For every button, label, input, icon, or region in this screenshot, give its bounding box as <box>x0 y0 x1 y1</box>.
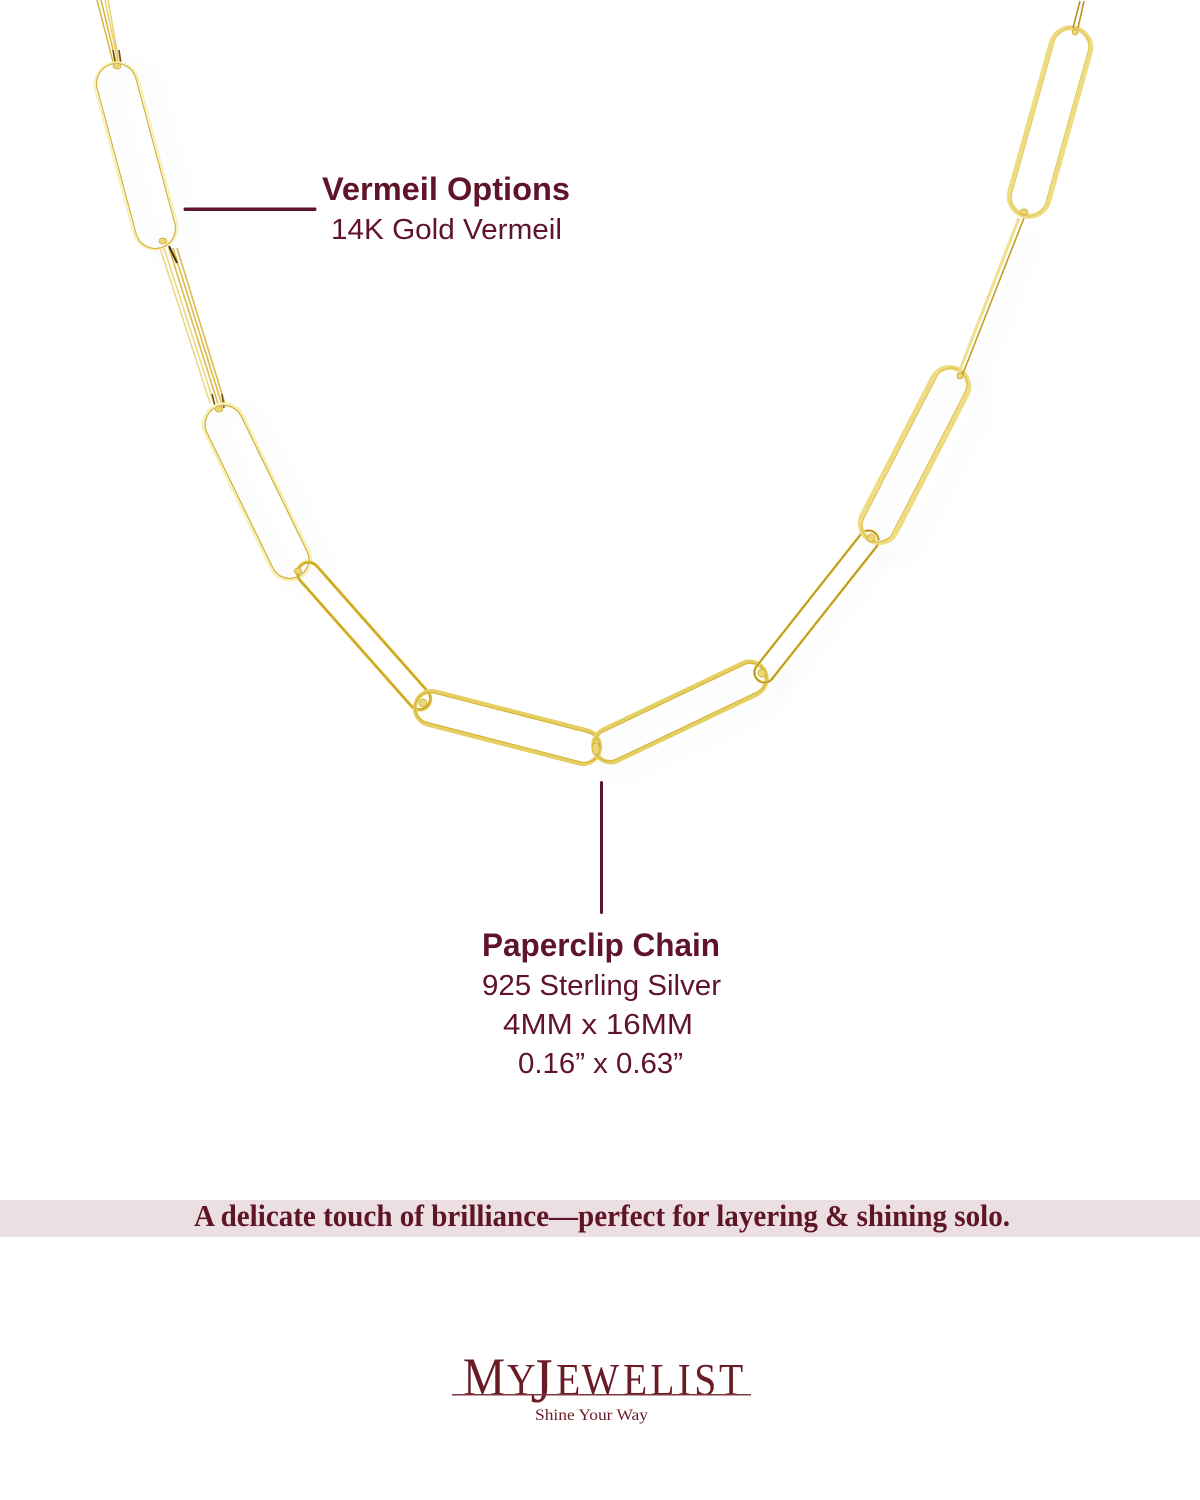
text: 14k gold vermeil: 14K Gold Vermeil <box>331 214 562 246</box>
tagline banner <box>0 1198 1200 1237</box>
heading: paperclip chain: Paperclip Chain <box>482 927 720 963</box>
text: size in inches: 0.16” x 0.63” <box>518 1048 683 1080</box>
link 10: flat top right link <box>1005 23 1095 221</box>
logo wordmark: W <box>582 1356 619 1406</box>
text: material: 925 Sterling Silver <box>482 970 721 1002</box>
link 3: open left link <box>196 397 318 587</box>
banner background <box>0 1200 1200 1237</box>
callout line: vermeil options <box>184 208 316 211</box>
link 9: edge-on right link <box>958 218 1024 376</box>
link 1: open left link <box>90 58 182 254</box>
logo wordmark: E <box>623 1356 647 1406</box>
logo wordmark: E <box>556 1356 580 1406</box>
tagline text: A delicate touch of brilliance—perfect for layering & shining solo. <box>194 1198 1010 1233</box>
link 7: narrow right link <box>750 527 883 686</box>
callout text: paperclip chain <box>482 927 721 1080</box>
logo wordmark: M <box>463 1348 505 1408</box>
logo slogan: Shine Your Way <box>535 1407 648 1424</box>
link 11: top right partial <box>1073 1 1084 28</box>
logo rule <box>452 1394 751 1396</box>
link 5: bottom left link <box>411 687 604 768</box>
chain junction knots <box>113 29 1078 755</box>
logo wordmark: T <box>719 1356 743 1406</box>
link 0: top left partial <box>97 0 121 64</box>
logo wordmark: L <box>650 1356 675 1406</box>
logo wordmark: I <box>678 1356 691 1406</box>
link 2: edge-on left link <box>160 246 225 408</box>
callout text: vermeil options <box>322 171 570 246</box>
logo wordmark: J <box>531 1346 553 1417</box>
logo: myjewelist <box>452 1346 751 1424</box>
necklace: paperclip chain <box>90 0 1095 779</box>
heading: vermeil options: Vermeil Options <box>322 171 570 207</box>
logo wordmark: Y <box>507 1356 535 1406</box>
link 4: narrow link <box>293 558 435 714</box>
link 8: flat right link <box>854 361 975 549</box>
callout line: paperclip chain <box>600 781 603 914</box>
logo wordmark: S <box>694 1356 716 1406</box>
link 6: bottom right link <box>588 656 772 768</box>
text: size in millimetres: 4MM x 16MM <box>503 1009 693 1041</box>
chain soft shadow <box>107 64 1035 779</box>
